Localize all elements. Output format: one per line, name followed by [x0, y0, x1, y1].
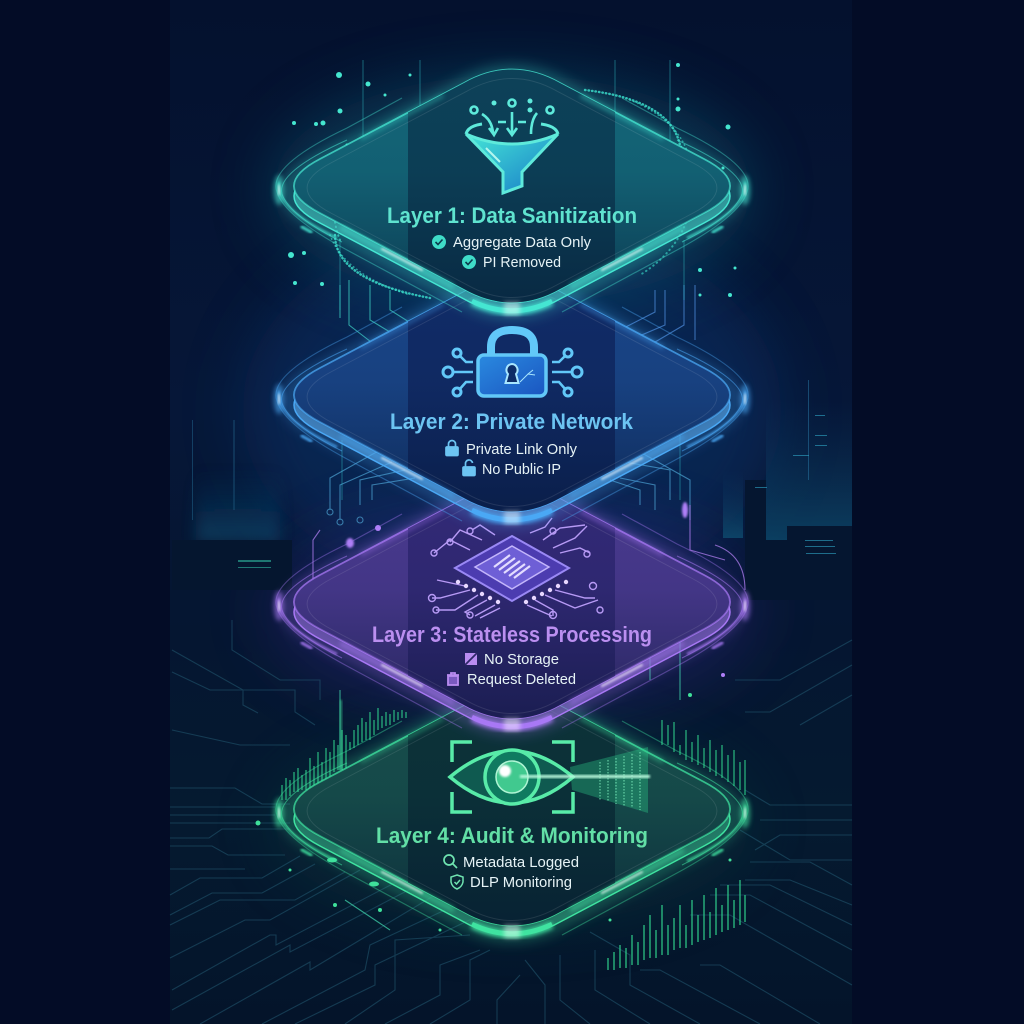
plate: layer 1 — [268, 58, 756, 315]
panel: layer 4 audit and monitoring — [268, 681, 756, 938]
icon: circuit padlock — [443, 330, 582, 396]
icon: processor chip — [428, 518, 603, 618]
icon: check pi — [462, 255, 476, 269]
icon: trash — [447, 673, 459, 685]
text: pi removed: PI Removed — [483, 255, 561, 271]
heading: layer 1: Layer 1: Data Sanitization — [387, 203, 637, 228]
icon: shield — [451, 875, 463, 889]
plate: layer 3 — [268, 474, 756, 731]
icon: magnifier — [444, 855, 457, 868]
text: private link only: Private Link Only — [466, 442, 578, 458]
icon: open lock — [463, 460, 475, 476]
heading: layer 2: Layer 2: Private Network — [390, 409, 634, 434]
bar charts — [282, 708, 745, 970]
particle dust rings and dots — [256, 63, 736, 932]
icon: data funnel — [466, 98, 558, 193]
panel: layer 3 stateless processing — [268, 474, 756, 731]
city skyline — [172, 380, 852, 600]
plate: layer 2 — [268, 267, 756, 524]
plate: layer 4 — [268, 681, 756, 938]
icon: no storage — [465, 653, 477, 665]
panel: layer 2 private network — [268, 267, 756, 524]
text: no public ip: No Public IP — [482, 462, 561, 478]
panel: layer 1 data sanitization — [268, 58, 756, 315]
heading: layer 4: Layer 4: Audit & Monitoring — [376, 823, 648, 848]
text: aggregate data only: Aggregate Data Only — [453, 235, 592, 251]
text: no storage: No Storage — [484, 652, 559, 668]
text: dlp monitoring: DLP Monitoring — [470, 875, 572, 891]
icon: check aggregate — [432, 235, 446, 249]
heading: layer 3: Layer 3: Stateless Processing — [372, 622, 652, 647]
text: request deleted: Request Deleted — [467, 672, 576, 688]
icon: eye scanner — [450, 742, 650, 813]
background circuit traces — [170, 60, 852, 1024]
icon: small lock — [446, 440, 458, 456]
text: metadata logged: Metadata Logged — [463, 855, 579, 871]
